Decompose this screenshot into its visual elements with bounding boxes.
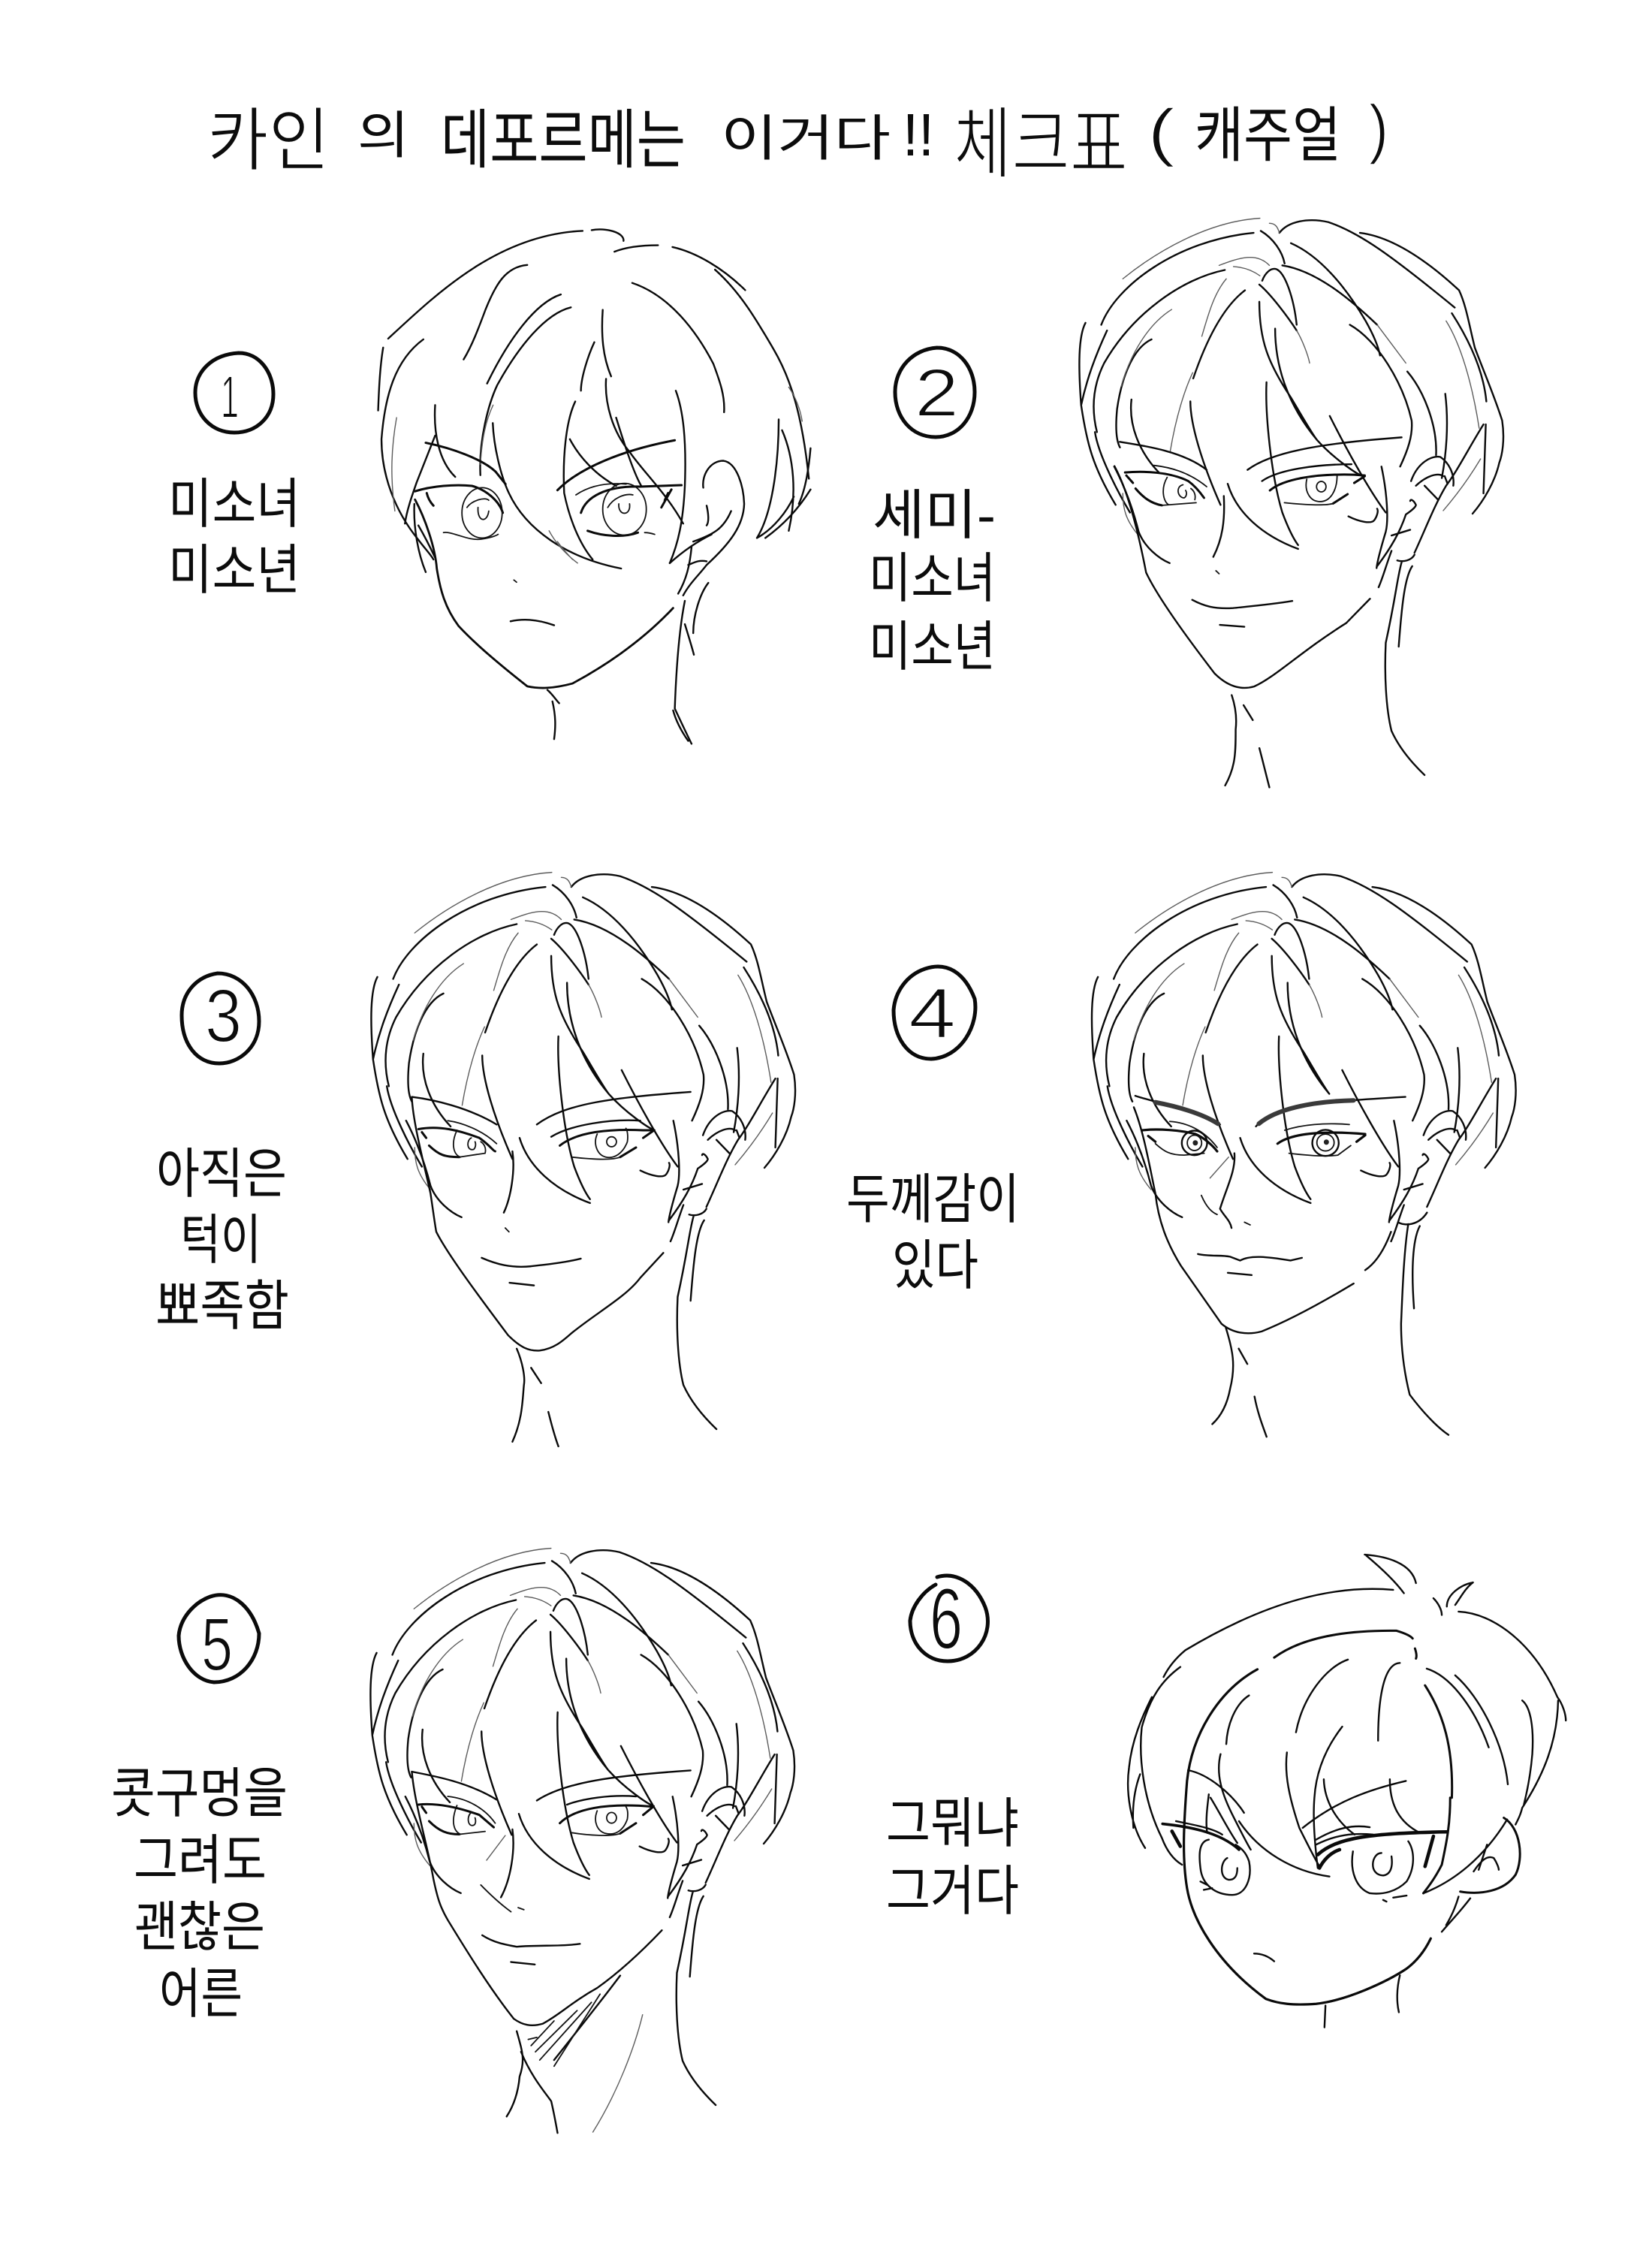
panel: item 4 number: [894, 967, 975, 1059]
text: item 2 label: 세미-: [873, 486, 996, 546]
text: item 6 label: [886, 1794, 1019, 1922]
hair of face 2: [1079, 219, 1503, 775]
text: item 3 label: [155, 1145, 289, 1337]
title: 체크표: [954, 101, 1128, 189]
text: item 3 label: 턱이: [180, 1211, 261, 1271]
illustration: face 4: [1092, 873, 1516, 1437]
illustration: face 2: [1079, 219, 1503, 787]
panel: item 2 number: [895, 348, 975, 437]
text: item 5 label: 어른: [159, 1965, 243, 2025]
title: !!: [903, 101, 934, 168]
panel: item 6 number: [910, 1571, 987, 1667]
text: item 1 label: 미소녀: [168, 475, 300, 535]
face lines of face 5: [411, 1770, 691, 2133]
text: item 2 label: 미소녀: [869, 549, 996, 609]
text: item 2 label: [869, 486, 996, 677]
illustration: face 3: [371, 873, 795, 1446]
panel: item 1 number: [195, 353, 273, 433]
title: 이거다: [721, 110, 891, 166]
hair of face 4: [1092, 873, 1516, 1241]
text: item 4 label: [846, 1170, 1020, 1296]
panel: item 3 number: [182, 973, 259, 1063]
text: item 6 label: 그뭐냐: [886, 1794, 1019, 1854]
illustration: face 6: [1128, 1555, 1566, 2028]
text: item 6 label: 그거다: [886, 1862, 1019, 1922]
text: item 5 label: 콧구멍을: [111, 1764, 288, 1824]
panel: item 4 number: 4: [909, 974, 956, 1054]
hair of face 3: [371, 873, 795, 1429]
text: item 4 label: 있다: [892, 1236, 978, 1296]
title: (: [1147, 97, 1175, 168]
title: [207, 92, 1388, 189]
panel: item 5 number: 5: [201, 1603, 233, 1687]
panel: item 1 number: 1: [221, 363, 239, 430]
panel: item 2 number: 2: [915, 356, 959, 431]
hair of face 5: [370, 1549, 794, 2105]
illustration: face 5: [370, 1549, 794, 2133]
text: item 4 label: 두께감이: [846, 1170, 1020, 1230]
panel: item 6 number: 6: [930, 1571, 963, 1667]
text: item 5 label: 괜찮은: [134, 1898, 265, 1958]
text: item 5 label: 그려도: [134, 1831, 267, 1891]
text: item 2 label: 미소년: [869, 617, 996, 677]
title: 의: [357, 107, 409, 164]
title: 캐주얼: [1195, 102, 1341, 169]
title: 카인: [207, 103, 330, 179]
text: item 3 label: 뾰족함: [155, 1277, 289, 1337]
text: item 3 label: 아직은: [156, 1145, 287, 1205]
title: ): [1369, 92, 1388, 165]
panel: item 5 number: [179, 1595, 259, 1687]
illustration: face 1: [378, 229, 810, 743]
title: 데포르메는: [441, 104, 686, 176]
text: item 1 label: [168, 475, 300, 601]
face lines of face 2: [1114, 437, 1402, 787]
text: item 1 label: 미소년: [168, 541, 300, 601]
text: item 5 label: [111, 1764, 288, 2025]
face lines of face 4: [1134, 1096, 1449, 1437]
panel: item 3 number: 3: [205, 974, 242, 1058]
face lines of face 3: [411, 1092, 691, 1446]
